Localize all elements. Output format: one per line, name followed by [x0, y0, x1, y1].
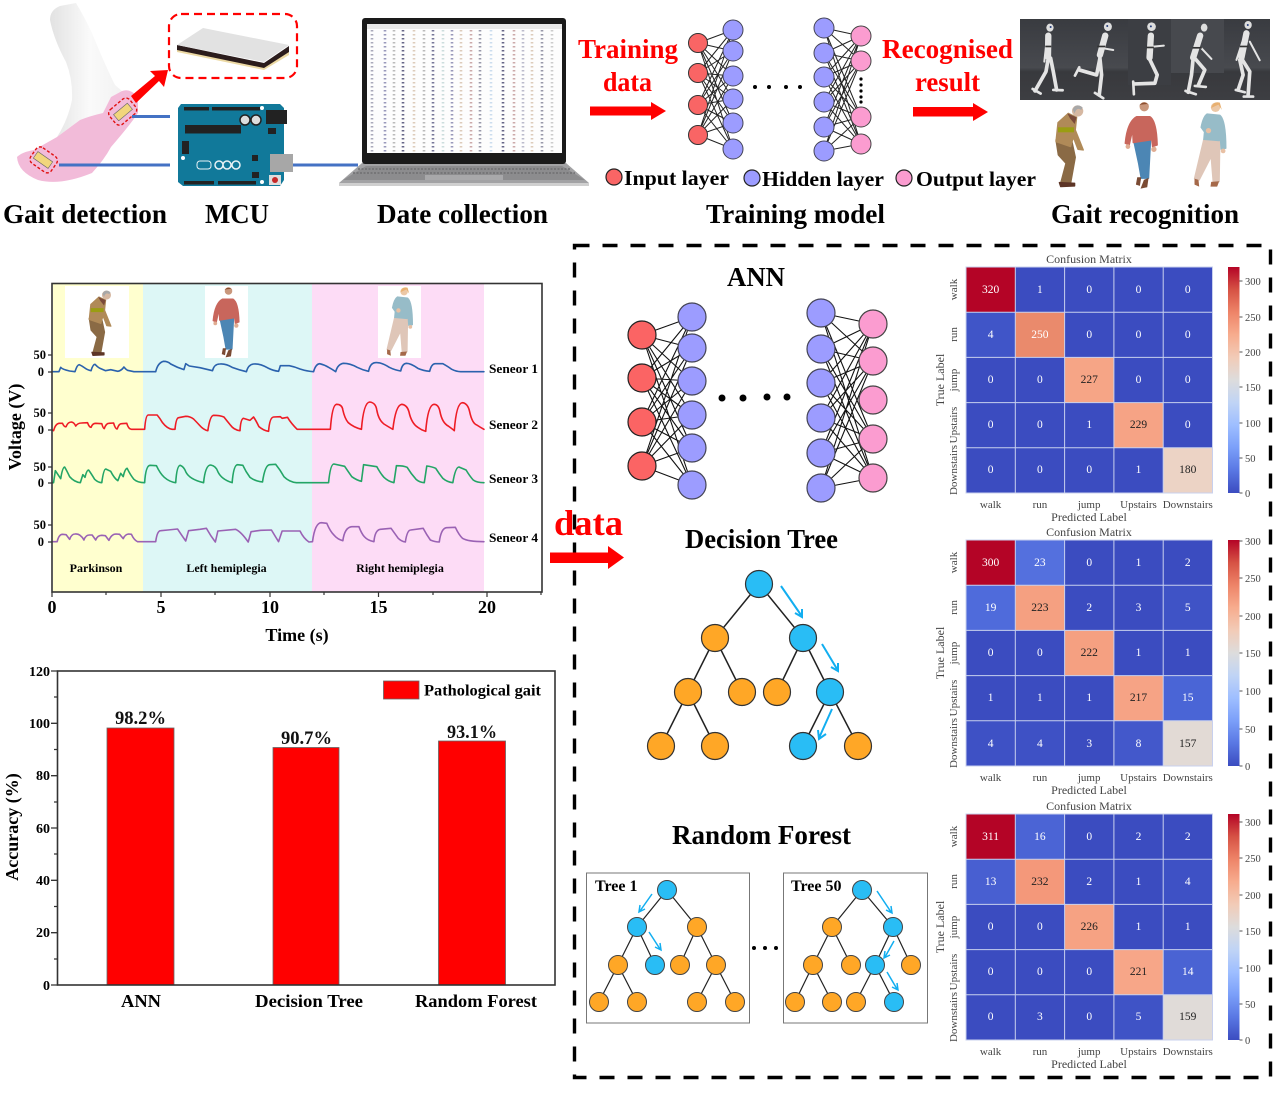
x axis title: Time (s): [265, 625, 329, 646]
sensor labels: Seneor 4: [489, 531, 539, 545]
cell values: 0: [1037, 419, 1043, 431]
column labels: jump: [1077, 499, 1101, 511]
blue path nodes: [746, 570, 844, 760]
x tick labels: 20: [478, 597, 496, 617]
column labels: walk: [980, 499, 1002, 511]
colour bar: 0: [1245, 1036, 1250, 1047]
cell values: 0: [1136, 374, 1142, 386]
column labels: walk: [980, 772, 1002, 784]
cell values: 1: [1185, 647, 1191, 659]
decision path arrows: [781, 586, 838, 739]
cell values: 300: [982, 557, 999, 569]
colour bar: 50: [1245, 1000, 1256, 1011]
row labels: walk: [948, 551, 960, 573]
title: Confusion Matrix: [1046, 799, 1132, 813]
network connections: [642, 313, 873, 488]
label: Training data: data: [603, 67, 652, 97]
cell values: 1: [1086, 419, 1092, 431]
cell values: 0: [988, 647, 994, 659]
section labels: Gait recognition: [1051, 199, 1239, 229]
y tick labels: 0: [38, 476, 44, 490]
colour bar: 200: [1245, 612, 1261, 623]
value labels: 90.7%: [281, 729, 332, 749]
heading: Random Forest: Random Forest: [672, 820, 851, 850]
cell values: 0: [1086, 831, 1092, 843]
cell values: 0: [1086, 464, 1092, 476]
x tick labels: [48, 597, 496, 617]
column labels: run: [1033, 499, 1048, 511]
cell values: 229: [1130, 419, 1147, 431]
section labels: Training model: [706, 199, 885, 229]
heading: Decision Tree: Decision Tree: [685, 524, 838, 554]
y tick labels: 0: [38, 423, 44, 437]
cell values: 13: [985, 876, 997, 888]
cell values: 1: [1185, 921, 1191, 933]
row labels: run: [948, 327, 960, 342]
cell values: 311: [982, 831, 999, 843]
icon: white sock: [50, 3, 122, 137]
y tick labels: 40: [36, 874, 50, 889]
condition labels: Parkinson: [70, 561, 123, 575]
arrow: sensor to enlarged chip: [131, 70, 168, 103]
cell values: 1: [1037, 284, 1043, 296]
blue path nodes: [628, 880, 676, 974]
y axis title: Voltage (V): [5, 384, 26, 470]
cell values: 0: [988, 921, 994, 933]
colour bar: 100: [1245, 687, 1261, 698]
row labels: Upstairs: [948, 407, 960, 443]
cell values: 0: [1185, 374, 1191, 386]
category labels: Decision Tree: [255, 991, 363, 1011]
cell values: 226: [1081, 921, 1098, 933]
cell values: 232: [1031, 876, 1049, 888]
column labels: Upstairs: [1120, 1046, 1157, 1058]
colour bar: 200: [1245, 891, 1261, 902]
category labels: [121, 991, 537, 1011]
colour bar: 100: [1245, 964, 1261, 975]
cell values: 223: [1031, 602, 1049, 614]
output nodes: [859, 310, 887, 492]
cell values: 1: [1086, 692, 1092, 704]
colour bar: [1228, 537, 1261, 773]
row labels: jump: [948, 368, 960, 392]
row labels: Downstairs: [948, 718, 960, 768]
cell values: 0: [1136, 284, 1142, 296]
cell values: 2: [1185, 831, 1191, 843]
row labels: [933, 825, 960, 1042]
label: Recognised result: [882, 34, 1013, 97]
cell values: 2: [1086, 876, 1092, 888]
cell values: 2: [1136, 831, 1142, 843]
cell values: 0: [988, 464, 994, 476]
y tick labels: [29, 665, 50, 994]
cell values: 1: [1136, 647, 1142, 659]
y tick labels: 0: [38, 535, 44, 549]
condition labels: Right hemiplegia: [356, 561, 444, 575]
y tick labels: 100: [29, 717, 50, 732]
orange nodes: [590, 918, 744, 1012]
row labels: run: [948, 874, 960, 889]
cell values: 2: [1086, 602, 1092, 614]
arrow: data into models: [550, 546, 624, 569]
output nodes: [851, 26, 871, 154]
condition labels: Left hemiplegia: [186, 561, 267, 575]
y tick labels: 50: [34, 518, 46, 532]
cell values: [982, 557, 1197, 750]
cell values: 1: [1136, 557, 1142, 569]
chart: voltage vs time for four sensors: [5, 284, 542, 646]
cell values: 1: [1037, 692, 1043, 704]
cell values: 0: [1086, 329, 1092, 341]
y tick labels: 50: [34, 460, 46, 474]
panel: dashed algorithm comparison frame: [574, 246, 1270, 1078]
row labels: Downstairs: [948, 992, 960, 1042]
colour bar: 50: [1245, 454, 1256, 465]
section labels: Date collection: [377, 199, 548, 229]
tree edges: [661, 584, 858, 746]
cell values: 1: [1136, 921, 1142, 933]
x tick labels: 10: [261, 597, 279, 617]
heading: ANN: ANN: [727, 262, 785, 292]
diagram: ANN network: [628, 299, 887, 502]
input nodes: [628, 321, 656, 480]
cell values: 1: [1136, 464, 1142, 476]
value labels: 93.1%: [447, 723, 497, 743]
image: three patient figures: [1056, 102, 1226, 189]
x tick labels: 5: [156, 597, 166, 617]
cell values: 16: [1034, 831, 1046, 843]
sensor labels: Seneor 3: [489, 472, 538, 486]
y tick labels: 60: [36, 822, 50, 837]
input nodes: [688, 34, 708, 144]
cell values: 4: [988, 329, 994, 341]
orange nodes: [786, 918, 920, 1012]
bars: [107, 728, 506, 985]
section labels: Gait detection: [3, 199, 167, 229]
colour bar: 150: [1245, 383, 1261, 394]
cell values: 4: [1037, 738, 1043, 750]
cell values: 0: [1086, 284, 1092, 296]
cell values: 5: [1136, 1011, 1142, 1023]
cell values: 3: [1037, 1011, 1043, 1023]
row labels: [933, 551, 960, 768]
ellipsis dots: [753, 77, 863, 104]
cell values: 0: [988, 374, 994, 386]
title: Confusion Matrix: [1046, 252, 1132, 266]
cell values: 0: [1136, 329, 1142, 341]
sensor labels: [489, 362, 539, 545]
colour bar: [1228, 267, 1261, 500]
colour bar: 250: [1245, 574, 1261, 585]
y tick labels: 120: [29, 665, 50, 680]
matrix cells: [966, 814, 1212, 1040]
tree edges: [599, 890, 735, 1002]
column labels: Downstairs: [1163, 499, 1213, 511]
label: Recognised result: result: [915, 67, 980, 97]
cell values: 5: [1185, 602, 1191, 614]
icon: Arduino MCU board: [178, 104, 293, 186]
cell values: 0: [988, 419, 994, 431]
cell values: 0: [988, 1011, 994, 1023]
hidden nodes: [723, 18, 834, 161]
column labels: jump: [1077, 1046, 1101, 1058]
column labels: Upstairs: [1120, 499, 1157, 511]
cell values: 1: [988, 692, 994, 704]
legend: [384, 681, 542, 700]
image: walking skeleton robots: [1020, 19, 1270, 100]
label: Training data: [578, 34, 678, 97]
title: Confusion Matrix: [1046, 525, 1132, 539]
label: Tree 1: Tree 1: [595, 878, 638, 895]
row labels: jump: [948, 915, 960, 939]
cell values: 2: [1185, 557, 1191, 569]
cell values: 0: [1086, 557, 1092, 569]
connection wires: [59, 116, 358, 165]
x tick labels: 15: [370, 597, 388, 617]
row labels: Downstairs: [948, 445, 960, 495]
arrow: training data to model: [590, 102, 666, 120]
cell values: 0: [988, 966, 994, 978]
icon: heel and toe sensors: [28, 96, 139, 175]
cell values: 0: [1185, 284, 1191, 296]
cell values: 0: [1185, 329, 1191, 341]
cell values: 3: [1086, 738, 1092, 750]
hidden nodes: [678, 299, 835, 502]
cell values: 15: [1182, 692, 1194, 704]
cell values: 0: [1037, 966, 1043, 978]
ellipsis between trees: [752, 946, 778, 950]
row labels: run: [948, 600, 960, 615]
colour bar: 0: [1245, 762, 1250, 773]
cell values: 14: [1182, 966, 1194, 978]
icon: pink insole: [17, 90, 138, 182]
cell values: 0: [1086, 1011, 1092, 1023]
y tick labels: 50: [34, 348, 46, 362]
cell values: 0: [1037, 464, 1043, 476]
category labels: ANN: [121, 991, 161, 1011]
row labels: walk: [948, 825, 960, 847]
cell values: 1: [1136, 876, 1142, 888]
sensor labels: Seneor 1: [489, 362, 538, 376]
y tick labels: [34, 348, 46, 549]
cell values: 19: [985, 602, 997, 614]
cell values: 0: [1086, 966, 1092, 978]
cell values: 0: [1185, 419, 1191, 431]
colour bar: 250: [1245, 854, 1261, 865]
value labels: 98.2%: [115, 709, 166, 729]
orange nodes: [648, 624, 872, 760]
colour bar: 150: [1245, 649, 1261, 660]
chart: model accuracy bars: [2, 665, 555, 1011]
cell values: 3: [1136, 602, 1142, 614]
chart frame and ticks: [51, 671, 555, 985]
colour bar: 250: [1245, 313, 1261, 324]
column labels: jump: [1077, 772, 1101, 784]
cell values: 0: [1037, 374, 1043, 386]
enlarged sensor chip: [169, 14, 297, 78]
cell values: 0: [1037, 647, 1043, 659]
y tick labels: 20: [36, 926, 50, 941]
cell values: 157: [1179, 738, 1197, 750]
diagram: training neural network: [688, 18, 871, 161]
diagram: random forest tree 1: [586, 873, 750, 1023]
matrix cells: [966, 540, 1212, 766]
confusion matrix: ANN: [933, 252, 1261, 524]
label: Tree 50: Tree 50: [791, 878, 842, 895]
cell values: 23: [1034, 557, 1046, 569]
icon: laptop with data table: [339, 18, 589, 186]
section labels: [3, 199, 1239, 229]
arrow: model to result: [913, 103, 988, 121]
chart frame and ticks: [48, 284, 542, 597]
cell values: 320: [982, 284, 999, 296]
cell values: 4: [1185, 876, 1191, 888]
colour bar: 300: [1245, 277, 1261, 288]
column labels: Predicted Label: [1051, 783, 1127, 797]
cell values: 180: [1179, 464, 1197, 476]
tree edges: [795, 890, 911, 1002]
column labels: Predicted Label: [1051, 1057, 1127, 1071]
column labels: [980, 499, 1213, 524]
cell values: 250: [1031, 329, 1049, 341]
sensor labels: Seneor 2: [489, 418, 538, 432]
colour bar: 100: [1245, 419, 1261, 430]
cell values: 227: [1081, 374, 1098, 386]
y tick labels: 80: [36, 769, 50, 784]
matrix cells: [966, 267, 1212, 493]
colour bar: [1228, 814, 1261, 1047]
row labels: True Label: [933, 353, 947, 406]
decision path arrows: [877, 891, 898, 990]
row labels: jump: [948, 641, 960, 665]
row labels: True Label: [933, 626, 947, 679]
condition background bands: [53, 284, 484, 592]
diagram: decision tree: [648, 570, 872, 760]
column labels: Downstairs: [1163, 772, 1213, 784]
decision path arrows: [639, 894, 661, 950]
column labels: Downstairs: [1163, 1046, 1213, 1058]
legend: network layers: Output layer: [916, 167, 1036, 191]
row labels: Upstairs: [948, 680, 960, 716]
y tick labels: 0: [38, 365, 44, 379]
diagram: random forest tree 50: [784, 873, 928, 1023]
cell values: 4: [988, 738, 994, 750]
label: Training data: Training: [578, 34, 678, 64]
colour bar: 150: [1245, 927, 1261, 938]
ellipsis dots: [718, 394, 790, 402]
label: data: data: [554, 503, 623, 543]
cell values: [982, 831, 1197, 1023]
cell values: 222: [1081, 647, 1098, 659]
figures inside the chart: [65, 286, 421, 358]
confusion matrix: Random Forest: [933, 799, 1261, 1071]
category labels: Random Forest: [415, 991, 537, 1011]
legend: Pathological gait: [424, 682, 542, 700]
cell values: 159: [1179, 1011, 1197, 1023]
colour bar: 200: [1245, 348, 1261, 359]
column labels: [980, 1046, 1213, 1071]
network connections: [698, 28, 861, 151]
confusion matrix: Decision Tree: [933, 525, 1261, 797]
legend: network layers: [606, 166, 1036, 191]
row labels: walk: [948, 278, 960, 300]
label: Recognised result: Recognised: [882, 34, 1013, 64]
colour bar: 300: [1245, 818, 1261, 829]
column labels: Upstairs: [1120, 772, 1157, 784]
cell values: 8: [1136, 738, 1142, 750]
colour bar: 0: [1245, 489, 1250, 500]
y tick labels: 0: [43, 979, 50, 994]
legend: network layers: Input layer: [624, 166, 729, 190]
x tick labels: 0: [48, 597, 56, 617]
condition labels: [70, 561, 444, 575]
column labels: Predicted Label: [1051, 510, 1127, 524]
legend: network layers: Hidden layer: [762, 167, 884, 191]
column labels: [980, 772, 1213, 797]
cell values: 217: [1130, 692, 1147, 704]
cell values: 0: [1037, 921, 1043, 933]
y tick labels: 50: [34, 406, 46, 420]
panel: gait detection foot sensor: [17, 3, 358, 182]
row labels: [933, 278, 960, 495]
blue path nodes: [852, 880, 904, 1012]
column labels: run: [1033, 772, 1048, 784]
column labels: run: [1033, 1046, 1048, 1058]
row labels: Upstairs: [948, 954, 960, 990]
cell values: 221: [1130, 966, 1147, 978]
value labels: [115, 709, 497, 749]
colour bar: 300: [1245, 537, 1261, 548]
column labels: walk: [980, 1046, 1002, 1058]
y axis title: Accuracy (%): [2, 773, 23, 881]
cell values: [982, 284, 1197, 476]
section labels: MCU: [205, 199, 269, 229]
row labels: True Label: [933, 900, 947, 953]
sensor traces: [52, 361, 484, 542]
colour bar: 50: [1245, 725, 1256, 736]
